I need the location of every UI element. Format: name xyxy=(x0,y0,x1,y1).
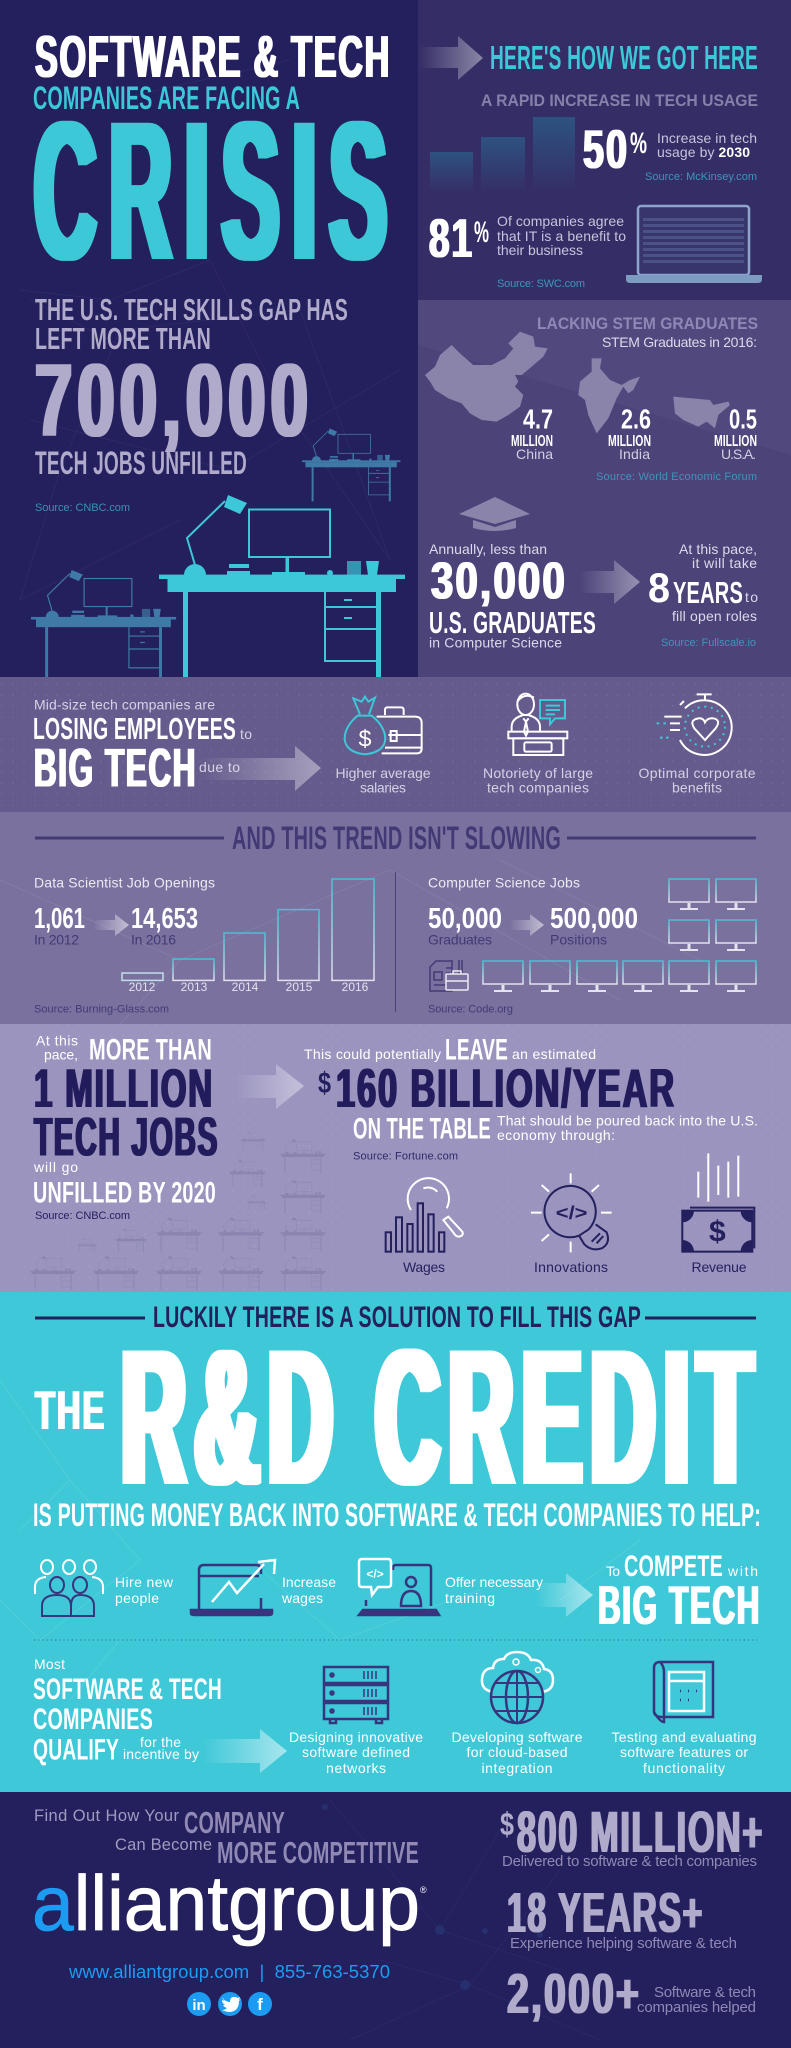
text: offer training: Offer necessary xyxy=(445,1574,543,1590)
text: for the incentive by xyxy=(123,1734,199,1762)
text: more competitive: MORE COMPETITIVE xyxy=(217,1835,419,1870)
stat: china: MILLION xyxy=(511,433,553,450)
text: at this pace xyxy=(36,1033,78,1062)
text: most: Most xyxy=(34,1656,65,1672)
text: caption testing: functionality xyxy=(643,1760,725,1776)
source: cnbc: Source: CNBC.com xyxy=(35,1210,130,1222)
divider xyxy=(395,872,396,1012)
text: mid-size: Mid-size tech companies are xyxy=(34,696,215,712)
icon: cloud globe xyxy=(482,1652,553,1723)
stat: 1,061 xyxy=(34,903,85,948)
text: to compete with: COMPETE xyxy=(624,1550,723,1583)
source: fortune: Source: Fortune.com xyxy=(353,1150,458,1162)
text: skills gap xyxy=(35,292,348,356)
icon: graduation cap xyxy=(459,497,530,531)
heading: big tech: due to xyxy=(199,759,240,775)
text: caption testing: Testing and evaluating xyxy=(612,1729,756,1745)
stat: 1,061: 1,061 xyxy=(34,903,85,935)
bar chart: job openings: 2016 xyxy=(342,980,369,994)
text: hire new people: Hire new xyxy=(115,1574,174,1590)
text: at this pace xyxy=(679,541,757,571)
stat: 500,000 xyxy=(550,903,638,948)
arrow xyxy=(510,914,544,936)
text: companies helped: Software & tech xyxy=(654,1984,756,2001)
panel: more than 1 million tech jobs xyxy=(0,1024,791,1292)
text: caption testing xyxy=(612,1729,756,1776)
source: swc: Source: SWC.com xyxy=(497,278,585,290)
stat: 50%: 50 xyxy=(583,118,629,180)
panel: lacking stem graduates xyxy=(418,300,791,677)
heading rule right xyxy=(645,1316,756,1320)
icon: online training xyxy=(359,1559,439,1615)
subheading: data scientist: Data Scientist Job Openings xyxy=(34,874,215,890)
arrow xyxy=(93,914,129,936)
text: offer training xyxy=(445,1574,543,1606)
illustration: faint desks xyxy=(30,1132,326,1290)
subheading: STEM Graduates in 2016: xyxy=(602,334,757,350)
icon: speaker at podium xyxy=(508,694,567,755)
heading: losing employees xyxy=(33,711,252,746)
icon: money bag and briefcase: $ xyxy=(359,726,372,752)
text: software and tech companies qualify: QUALIFY xyxy=(33,1734,119,1766)
stat: usa: 0.5 xyxy=(729,404,757,434)
icon: resume and briefcase xyxy=(430,960,468,991)
text: benefits caption xyxy=(638,765,756,796)
icon: facebook xyxy=(248,1992,272,2016)
text: companies helped xyxy=(637,1984,756,2016)
panel: crisis headline xyxy=(0,0,418,677)
text: companies agree: Of companies agree xyxy=(497,213,624,229)
stat: usa xyxy=(714,404,757,462)
text: more competitive: Can Become xyxy=(115,1836,212,1854)
stat: india xyxy=(608,404,651,462)
text: companies agree xyxy=(497,213,626,258)
icon: linkedin xyxy=(187,1992,211,2016)
subtitle: companies are facing a: COMPANIES ARE FACING A xyxy=(33,80,300,116)
stat: 8 years: 8 xyxy=(648,564,670,611)
text: website and phone: www.alliantgroup.com | 855-763-5370 xyxy=(68,1961,390,1982)
illustration: small upper desk xyxy=(302,428,400,501)
text: fill open roles: fill open roles xyxy=(672,608,757,624)
text: salaries caption xyxy=(336,765,431,796)
text: for the incentive by: for the xyxy=(140,1734,181,1750)
stat: china xyxy=(511,404,553,462)
arrow xyxy=(202,1729,287,1773)
arrow xyxy=(535,1573,593,1617)
stat: 700,000: 700,000 xyxy=(35,343,313,459)
text: companies agree: their business xyxy=(497,242,583,258)
icon: monitors grid xyxy=(483,879,756,992)
text: to compete with: To xyxy=(606,1563,620,1579)
text: caption cloud xyxy=(452,1729,583,1776)
text: could potentially leave xyxy=(304,1034,596,1066)
stat: 14,653 xyxy=(131,903,198,948)
text: increase in tech usage: Increase in tech xyxy=(657,130,757,146)
stat: 50,000 xyxy=(428,903,502,948)
text: caption networks: Designing innovative xyxy=(289,1729,423,1745)
source: fullscale: Source: Fullscale.io xyxy=(661,637,756,649)
stat: $800 million: $ xyxy=(500,1806,514,1842)
text: notoriety caption: Notoriety of large xyxy=(483,765,593,781)
text: poured back: That should be poured back into the U.S. xyxy=(497,1112,758,1128)
icon: book with calculator xyxy=(654,1662,713,1722)
icon: people xyxy=(35,1560,103,1616)
bar chart: job openings: 2014 xyxy=(232,980,259,994)
text: at this pace: pace, xyxy=(44,1046,78,1062)
stat: 1,061: In 2012 xyxy=(34,932,79,948)
source: burning glass: Source: Burning-Glass.com xyxy=(34,1003,169,1015)
text: could potentially leave: LEAVE xyxy=(445,1034,508,1066)
stat: 30,000: 30,000 xyxy=(431,552,567,610)
bar chart xyxy=(430,117,575,192)
stat: 8 years xyxy=(648,564,758,611)
stat: 8 years: YEARS xyxy=(673,575,743,610)
text: us graduates: U.S. GRADUATES xyxy=(429,605,596,640)
heading: losing employees: to xyxy=(240,726,252,742)
bar chart: job openings xyxy=(122,879,374,994)
text: find out how: COMPANY xyxy=(184,1805,285,1840)
stat: usa: MILLION xyxy=(714,433,757,450)
text: notoriety caption xyxy=(483,765,593,796)
arrow xyxy=(199,746,321,791)
map: india xyxy=(578,358,640,433)
text: increase wages xyxy=(281,1574,336,1606)
stat: 50%: % xyxy=(630,127,647,160)
text: caption cloud: for cloud-based xyxy=(466,1744,568,1760)
stat: 14,653: 14,653 xyxy=(131,903,198,935)
source: code.org: Source: Code.org xyxy=(428,1003,513,1015)
text: tech jobs unfilled: TECH JOBS UNFILLED xyxy=(35,445,247,481)
text: software and tech companies qualify: COMPANIES xyxy=(33,1703,153,1736)
text: delivered: Delivered to software & tech companies xyxy=(502,1853,757,1870)
subheading: computer science jobs: Computer Science Jobs xyxy=(428,874,580,890)
text: icon captions xyxy=(403,1259,747,1275)
stat: tech jobs: TECH JOBS xyxy=(34,1106,219,1168)
text: hire new people: people xyxy=(115,1590,159,1606)
map: china xyxy=(425,332,548,422)
source: world economic forum: Source: World Economic Forum xyxy=(596,471,757,483)
text: at this pace: At this xyxy=(36,1033,78,1049)
text: to compete with: with xyxy=(727,1563,758,1579)
panel: trend isn't slowing xyxy=(0,812,791,1024)
panel: here's how we got here xyxy=(418,0,791,300)
text: more competitive xyxy=(115,1835,419,1870)
stat: china: China xyxy=(516,446,553,462)
text: on the table: ON THE TABLE xyxy=(353,1113,491,1146)
text: poured back xyxy=(497,1112,758,1143)
heading rule right xyxy=(567,836,756,840)
text: caption cloud: Developing software xyxy=(452,1729,583,1745)
text: poured back: economy through: xyxy=(497,1127,615,1143)
text: find out how: Find Out How Your xyxy=(34,1807,180,1825)
text: hire new people xyxy=(115,1574,174,1606)
map: usa xyxy=(673,397,730,428)
icon: facebook: f xyxy=(257,1995,263,2014)
stat: china: 4.7 xyxy=(523,404,553,434)
text: increase wages: wages xyxy=(281,1590,323,1606)
text: companies helped: companies helped xyxy=(637,1999,756,2016)
heading rule left xyxy=(35,836,224,840)
text: caption networks xyxy=(289,1729,423,1776)
title: software and tech: SOFTWARE & TECH xyxy=(35,24,391,90)
stat: 500,000: 500,000 xyxy=(550,903,638,935)
stat: 1 million: 1 MILLION xyxy=(34,1057,214,1119)
stat: 14,653: In 2016 xyxy=(131,932,176,948)
text: benefits caption: benefits xyxy=(672,780,722,796)
logo: alliantgroup: alliantgroup xyxy=(32,1859,420,1947)
icon: innovation bulb xyxy=(531,1173,612,1252)
stat: 81%: 81 xyxy=(429,207,474,269)
text: salaries caption: Higher average xyxy=(336,765,431,781)
text: icon captions: Revenue xyxy=(692,1259,747,1275)
text: caption networks: software defined xyxy=(302,1744,410,1760)
title: the: THE xyxy=(35,1379,106,1441)
stat: 81%: % xyxy=(474,216,489,249)
arrow xyxy=(419,36,483,80)
bar chart: job openings: 2013 xyxy=(181,980,208,994)
stat: india: 2.6 xyxy=(621,404,651,434)
text: icon captions: Innovations xyxy=(534,1259,608,1275)
text: increase in tech usage: usage by 2030 xyxy=(657,144,750,160)
text: computer science: in Computer Science xyxy=(429,634,562,650)
text: at this pace: At this pace, xyxy=(679,541,757,557)
text: for the incentive by: incentive by xyxy=(123,1746,199,1762)
text: software and tech companies qualify: SOFTWARE & TECH xyxy=(33,1673,222,1706)
heading: losing employees: LOSING EMPLOYEES xyxy=(33,711,236,746)
icon: server stack xyxy=(324,1667,388,1723)
icon: money bag and briefcase xyxy=(345,697,422,754)
icon: online training: </> xyxy=(366,1567,384,1581)
stat: $160 billion per year: $ xyxy=(318,1067,331,1100)
stat: 500,000: Positions xyxy=(550,932,607,948)
stat: usa: U.S.A. xyxy=(721,446,756,462)
text: could potentially leave: This could potentially xyxy=(304,1046,441,1062)
icon: laptop xyxy=(626,206,762,283)
illustration: main desk xyxy=(159,495,405,677)
stat: 2,000: 2,000+ xyxy=(507,1962,641,2026)
text: unfilled by 2020: UNFILLED BY 2020 xyxy=(33,1177,216,1210)
divider xyxy=(34,1639,757,1641)
text: skills gap: THE U.S. TECH SKILLS GAP HAS xyxy=(35,292,348,327)
text: more than: MORE THAN xyxy=(89,1034,212,1066)
text: caption networks: networks xyxy=(326,1760,386,1776)
text: find out how xyxy=(34,1805,285,1840)
source: mckinsey: Source: McKinsey.com xyxy=(645,171,757,183)
icon: twitter xyxy=(218,1992,242,2016)
text: skills gap: LEFT MORE THAN xyxy=(35,321,211,356)
text: software and tech companies qualify xyxy=(33,1673,222,1766)
text: offer training: training xyxy=(445,1590,495,1606)
bar chart: job openings: 2012 xyxy=(129,980,156,994)
heading: LACKING STEM GRADUATES xyxy=(537,315,758,333)
text: benefits caption: Optimal corporate xyxy=(638,765,756,781)
icon: heart stopwatch xyxy=(657,694,732,755)
arrow xyxy=(580,560,640,604)
panel: losing employees to big tech xyxy=(0,677,791,812)
text: increase in tech usage xyxy=(657,130,757,160)
text: could potentially leave: an estimated xyxy=(512,1046,596,1062)
text: notoriety caption: tech companies xyxy=(487,780,589,796)
subheading: A RAPID INCREASE IN TECH USAGE xyxy=(481,92,758,110)
logo: alliantgroup: ® xyxy=(420,1885,427,1895)
text: companies agree: that IT is a benefit to xyxy=(497,228,626,244)
bar chart: job openings: 2015 xyxy=(286,980,313,994)
icon: laptop with rising chart xyxy=(191,1560,275,1615)
heading rule left xyxy=(35,1316,145,1320)
text: caption testing: software features or xyxy=(620,1744,748,1760)
icon: innovation bulb: </> xyxy=(556,1202,588,1223)
icon: revenue cash xyxy=(682,1153,754,1252)
text: increase wages: Increase xyxy=(282,1574,336,1590)
text: annually: Annually, less than xyxy=(429,541,547,557)
stat: india: India xyxy=(619,446,650,462)
heading: AND THIS TREND ISN'T SLOWING xyxy=(232,820,561,856)
source: cnbc: Source: CNBC.com xyxy=(35,502,130,514)
icon: linkedin: in xyxy=(192,1997,206,2014)
text: experience: Experience helping software & tech xyxy=(510,1935,737,1952)
panel: r&d credit solution xyxy=(0,1292,791,1792)
arrow xyxy=(235,1064,304,1109)
panel: footer xyxy=(0,1792,791,2048)
text: salaries caption: salaries xyxy=(360,780,406,796)
stat: 50,000: Graduates xyxy=(428,932,492,948)
text: caption cloud: integration xyxy=(482,1760,552,1776)
heading: big tech: BIG TECH xyxy=(34,736,197,798)
icon: revenue cash: $ xyxy=(709,1216,726,1249)
text: at this pace: it will take xyxy=(692,555,757,571)
text: will go: will go xyxy=(33,1159,78,1175)
icon: wages magnifier xyxy=(386,1178,463,1252)
stat: india: MILLION xyxy=(608,433,651,450)
illustration: small left desk xyxy=(31,570,176,677)
stat: 50,000: 50,000 xyxy=(428,903,502,935)
stat: 8 years: to xyxy=(745,589,758,605)
text: icon captions: Wages xyxy=(403,1259,445,1275)
